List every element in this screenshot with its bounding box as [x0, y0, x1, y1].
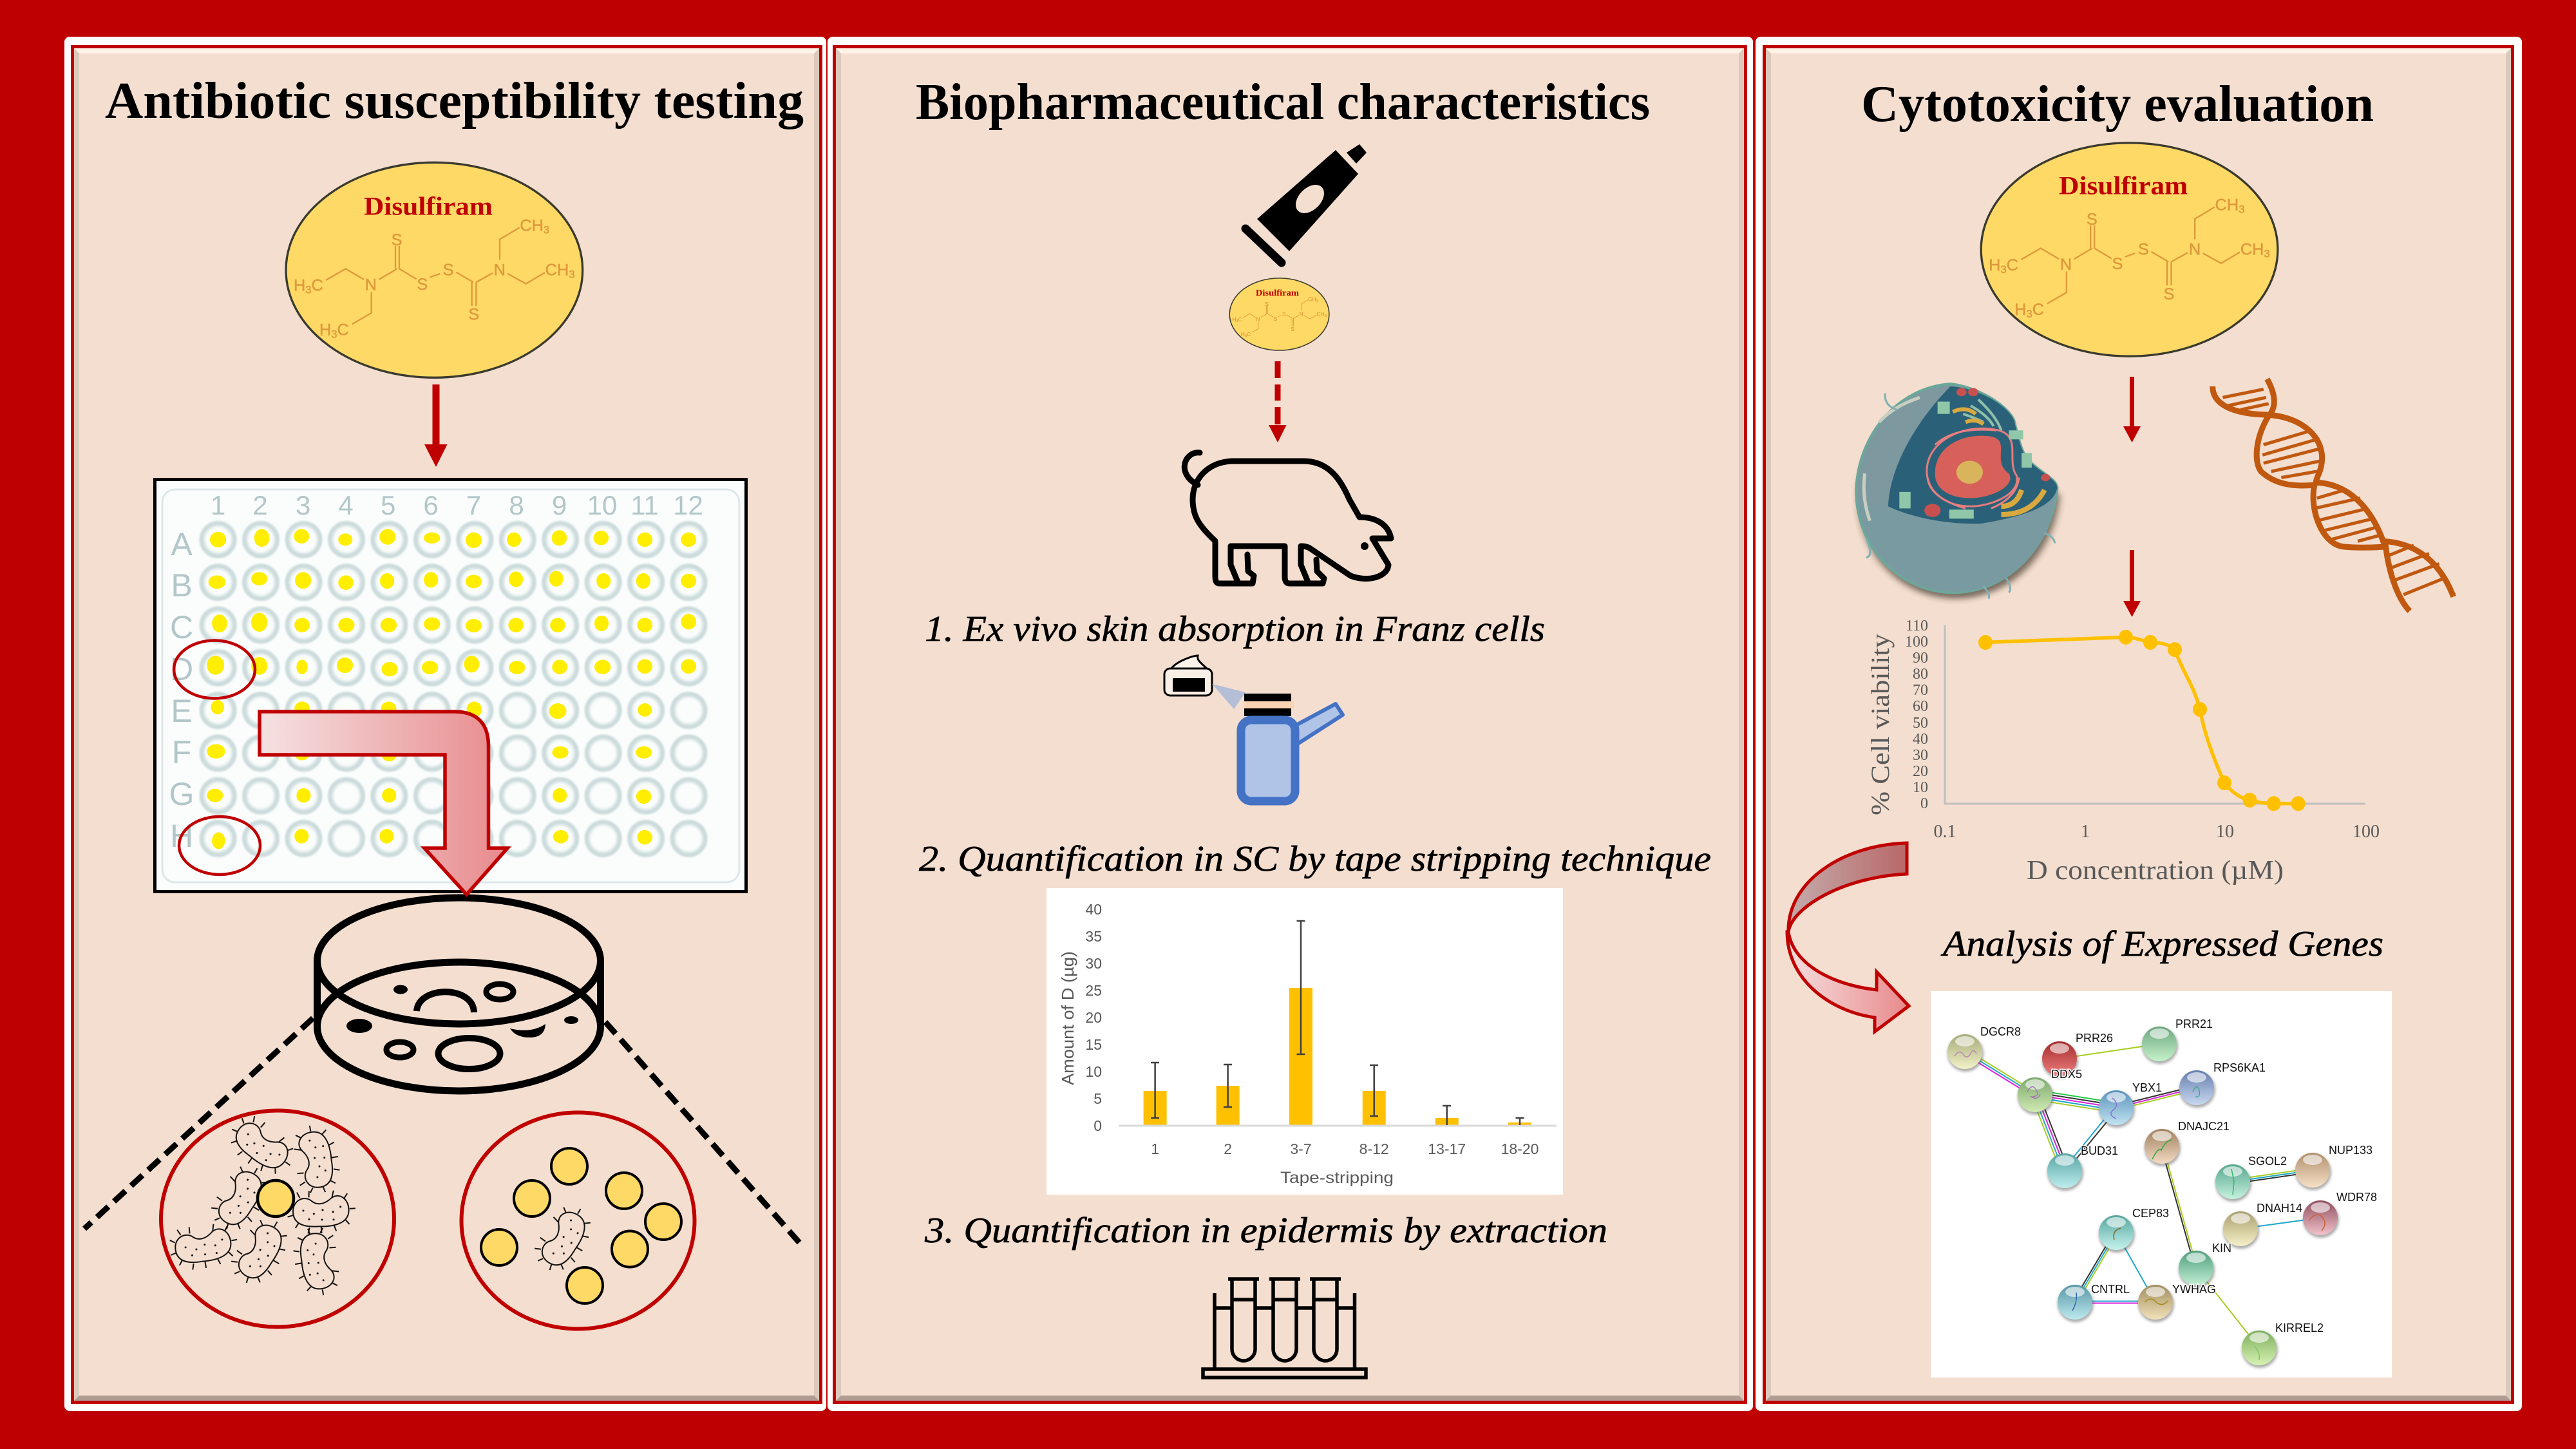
icon: test tube rack	[1203, 1279, 1366, 1378]
bacterium	[205, 1158, 277, 1238]
x axis labels: 13-17	[1428, 1141, 1466, 1157]
arrow: to viability chart	[2123, 550, 2141, 617]
bacterium	[286, 1188, 357, 1236]
96-well plate: 9	[552, 490, 567, 520]
step 2 label: 2. Quantification in SC by tape stripping technique	[919, 839, 1711, 879]
disulfiram ellipse: S	[2138, 241, 2149, 259]
node labels: DNAH14	[2257, 1202, 2302, 1215]
disulfiram ellipse: CH	[545, 261, 569, 279]
x axis labels: 18-20	[1501, 1141, 1539, 1157]
panel: cytotoxicity evaluation	[1756, 37, 2522, 1411]
disulfiram ellipse	[286, 162, 583, 377]
y axis labels: 15	[1085, 1036, 1102, 1053]
y axis labels	[1905, 618, 1928, 812]
disulfiram ellipse: S	[443, 261, 454, 279]
disulfiram ellipse: CH	[2215, 196, 2239, 214]
bacterium	[289, 1122, 344, 1197]
node labels: BUD31	[2081, 1144, 2118, 1157]
disulfiram ellipse: 3	[331, 328, 337, 341]
small disulfiram ellipse: 3	[1316, 299, 1318, 303]
bar chart: tape stripping	[1046, 888, 1563, 1195]
x axis labels: 0.1	[1933, 822, 1956, 842]
x axis labels	[1933, 822, 2380, 842]
disulfiram ellipse: S	[392, 231, 402, 249]
disulfiram ellipse: H	[294, 277, 305, 295]
small disulfiram ellipse: C	[1238, 316, 1242, 323]
zoom circle: bacteria with one disulfiram particle	[161, 1109, 394, 1327]
disulfiram ellipse: Disulfiram	[2059, 171, 2188, 200]
x axis labels: 100	[2353, 822, 2380, 842]
96-well plate: 2	[252, 490, 268, 520]
heading: biopharmaceutical: Biopharmaceutical characteristics	[916, 74, 1650, 131]
icon: cream jar	[1164, 656, 1212, 696]
x axis labels: 10	[2216, 822, 2234, 842]
disulfiram ellipse: 3	[2239, 204, 2244, 216]
small disulfiram ellipse: 3	[1325, 314, 1327, 318]
arrow: dashed to pig	[1269, 361, 1287, 442]
disulfiram ellipse: H	[1989, 256, 2000, 274]
y axis labels: 35	[1085, 928, 1102, 945]
disulfiram ellipse: 3	[569, 268, 575, 280]
96-well plate: 3	[296, 490, 310, 520]
network edges	[1964, 1044, 2320, 1348]
Franz diffusion cell	[1241, 694, 1343, 801]
disulfiram ellipse: S	[2087, 211, 2098, 229]
y axis labels: 70	[1913, 682, 1928, 699]
96-well plate: 5	[381, 490, 395, 520]
y axis labels: 20	[1085, 1009, 1102, 1026]
x axis labels: 3-7	[1290, 1141, 1312, 1157]
heading: antibiotic: Antibiotic susceptibility testing	[105, 73, 804, 129]
y axis labels: 10	[1913, 779, 1928, 796]
small disulfiram ellipse: 3	[1245, 334, 1247, 338]
illustration: eukaryotic cell	[1856, 384, 2060, 599]
node labels: KIRREL2	[2275, 1321, 2324, 1334]
96-well plate: E	[171, 693, 193, 729]
node labels: YBX1	[2132, 1081, 2162, 1094]
panel: biopharmaceutical characteristics	[828, 37, 1753, 1411]
small disulfiram ellipse: CH	[1308, 296, 1316, 302]
icon: pig	[1184, 453, 1391, 583]
y axis labels: 30	[1913, 747, 1928, 764]
curved arrow: chart to gene analysis	[1787, 843, 1909, 1032]
subheading: analysis of expressed genes: Analysis of Expressed Genes	[1940, 924, 2383, 964]
y axis labels	[1085, 901, 1102, 1134]
x axis labels	[1151, 1141, 1539, 1157]
disulfiram ellipse: S	[468, 306, 479, 324]
node labels: DGCR8	[1980, 1025, 2021, 1038]
arrow: plate to petri dish	[260, 712, 507, 895]
small disulfiram ellipse: H	[1232, 316, 1236, 323]
disulfiram ellipse: S	[2112, 255, 2123, 273]
disulfiram ellipse: 3	[2000, 263, 2007, 276]
96-well plate: 11	[630, 490, 659, 520]
disulfiram ellipse: C	[312, 277, 323, 295]
96-well plate: 7	[466, 490, 481, 520]
arrow: to cell and DNA	[2123, 377, 2141, 442]
x axis title: Tape-stripping	[1280, 1169, 1394, 1187]
node labels: CNTRL	[2091, 1283, 2130, 1296]
disulfiram ellipse: 3	[2264, 248, 2270, 260]
red highlight ovals on plate	[174, 640, 260, 875]
step 1 label: 1. Ex vivo skin absorption in Franz cells	[925, 609, 1545, 649]
small disulfiram ellipse: N	[1300, 311, 1303, 317]
curve	[1985, 637, 2298, 804]
error bars	[1151, 921, 1524, 1125]
96-well plate: 12	[673, 490, 703, 520]
disulfiram ellipse: H	[319, 321, 331, 339]
disulfiram ellipse: CH	[520, 216, 544, 234]
bacterium	[222, 1109, 302, 1184]
bacterium	[225, 1211, 297, 1292]
bacterium	[166, 1219, 241, 1274]
small disulfiram ellipse: N	[1256, 316, 1260, 322]
bacterium	[289, 1224, 344, 1299]
y axis title: % Cell viability	[1866, 634, 1895, 815]
disulfiram ellipse: CH	[2240, 241, 2264, 259]
x axis title: D concentration (µM)	[2027, 856, 2284, 886]
small disulfiram ellipse	[1229, 278, 1329, 350]
network nodes	[1947, 1027, 2339, 1368]
protein interaction network	[1931, 991, 2392, 1378]
y axis labels: 10	[1085, 1063, 1102, 1080]
small disulfiram ellipse: H	[1241, 331, 1245, 337]
disulfiram ellipse: Disulfiram	[364, 191, 493, 220]
node labels: PRR21	[2175, 1018, 2213, 1030]
node labels: PRR26	[2076, 1032, 2113, 1045]
bacterium	[529, 1198, 600, 1279]
x axis labels: 1	[2081, 822, 2090, 842]
node labels: WDR78	[2336, 1191, 2377, 1204]
y axis labels: 110	[1906, 618, 1928, 634]
y axis labels: 90	[1913, 650, 1928, 667]
x axis labels: 8-12	[1359, 1141, 1389, 1157]
96-well plate: 1	[211, 490, 225, 520]
y axis labels: 80	[1913, 666, 1928, 683]
disulfiram ellipse: H	[2014, 301, 2026, 319]
y axis labels: 40	[1085, 901, 1102, 918]
application cone	[1212, 684, 1245, 709]
x axis labels: 2	[1224, 1141, 1232, 1157]
node labels: RPS6KA1	[2213, 1061, 2266, 1074]
96-well plate: A	[171, 526, 193, 562]
node labels: SGOL2	[2248, 1155, 2287, 1168]
node labels: DDX5	[2051, 1068, 2082, 1081]
panel: antibiotic susceptibility testing	[64, 37, 826, 1411]
disulfiram particle	[258, 1180, 294, 1217]
small disulfiram ellipse: S	[1282, 311, 1286, 317]
disulfiram ellipse: S	[2164, 285, 2174, 303]
small disulfiram ellipse: Disulfiram	[1256, 288, 1300, 298]
step 3 label: 3. Quantification in epidermis by extraction	[924, 1211, 1607, 1251]
zoom circle: disulfiram particles with one bacterium	[461, 1113, 694, 1329]
disulfiram ellipse: N	[2189, 241, 2201, 259]
small disulfiram ellipse: CH	[1316, 311, 1325, 317]
96-well plate: 6	[423, 490, 439, 520]
y axis labels: 60	[1913, 698, 1928, 715]
y axis labels: 50	[1913, 715, 1928, 732]
96-well plate: H	[170, 818, 193, 854]
icon: ointment tube	[1245, 144, 1367, 263]
disulfiram particles	[481, 1148, 681, 1303]
96-well plate: 8	[509, 490, 524, 520]
heading: cytotoxicity: Cytotoxicity evaluation	[1861, 76, 2374, 133]
96-well plate: D	[170, 651, 193, 687]
node labels: CEP83	[2132, 1207, 2169, 1220]
node labels	[1980, 1018, 2377, 1334]
disulfiram ellipse: 3	[305, 284, 312, 296]
y axis labels: 0	[1920, 795, 1928, 812]
disulfiram ellipse: N	[2060, 256, 2072, 274]
y axis labels: 30	[1085, 955, 1102, 972]
line chart: cell viability	[1866, 618, 2380, 886]
dashed lines: zoom from dish	[84, 1018, 800, 1244]
y axis labels: 40	[1913, 731, 1928, 748]
96-well plate: G	[169, 776, 194, 812]
disulfiram ellipse	[1981, 143, 2278, 356]
y axis labels: 100	[1905, 634, 1928, 650]
y axis labels: 0	[1094, 1117, 1102, 1134]
disulfiram ellipse: C	[2032, 301, 2044, 319]
y axis title: Amount of D (µg)	[1058, 951, 1077, 1085]
y axis labels: 25	[1085, 982, 1102, 999]
disulfiram ellipse: N	[365, 276, 377, 294]
disulfiram ellipse: S	[417, 276, 428, 294]
arrow: disulfiram to plate	[424, 384, 447, 467]
96-well plate: 4	[338, 490, 354, 520]
petri dish	[317, 898, 600, 1091]
small disulfiram ellipse: 3	[1236, 319, 1238, 323]
small disulfiram ellipse: S	[1291, 326, 1294, 332]
small disulfiram ellipse: S	[1274, 316, 1278, 322]
node labels: NUP133	[2329, 1144, 2372, 1157]
96-well plate: 10	[587, 490, 617, 520]
node labels: KIN	[2212, 1242, 2231, 1255]
96-well plate: C	[170, 609, 193, 645]
disulfiram ellipse: 3	[544, 223, 549, 236]
x axis labels: 1	[1151, 1141, 1159, 1157]
y axis labels: 5	[1094, 1090, 1102, 1107]
bars	[1144, 988, 1531, 1125]
96-well plate	[155, 479, 746, 891]
disulfiram ellipse: C	[337, 321, 349, 339]
protein structure squiggles	[1955, 1050, 2325, 1360]
small disulfiram ellipse: S	[1265, 301, 1269, 307]
disulfiram ellipse: N	[494, 261, 506, 279]
disulfiram ellipse: C	[2007, 256, 2018, 274]
illustration: DNA double helix	[2213, 379, 2454, 611]
node labels: YWHAG	[2172, 1283, 2216, 1296]
markers	[1978, 630, 2306, 811]
small disulfiram ellipse: C	[1247, 331, 1251, 337]
96-well plate: F	[172, 734, 191, 770]
96-well plate: B	[171, 567, 193, 603]
node labels: DNAJC21	[2178, 1120, 2230, 1133]
y axis labels: 20	[1913, 763, 1928, 780]
disulfiram ellipse: 3	[2026, 308, 2032, 320]
